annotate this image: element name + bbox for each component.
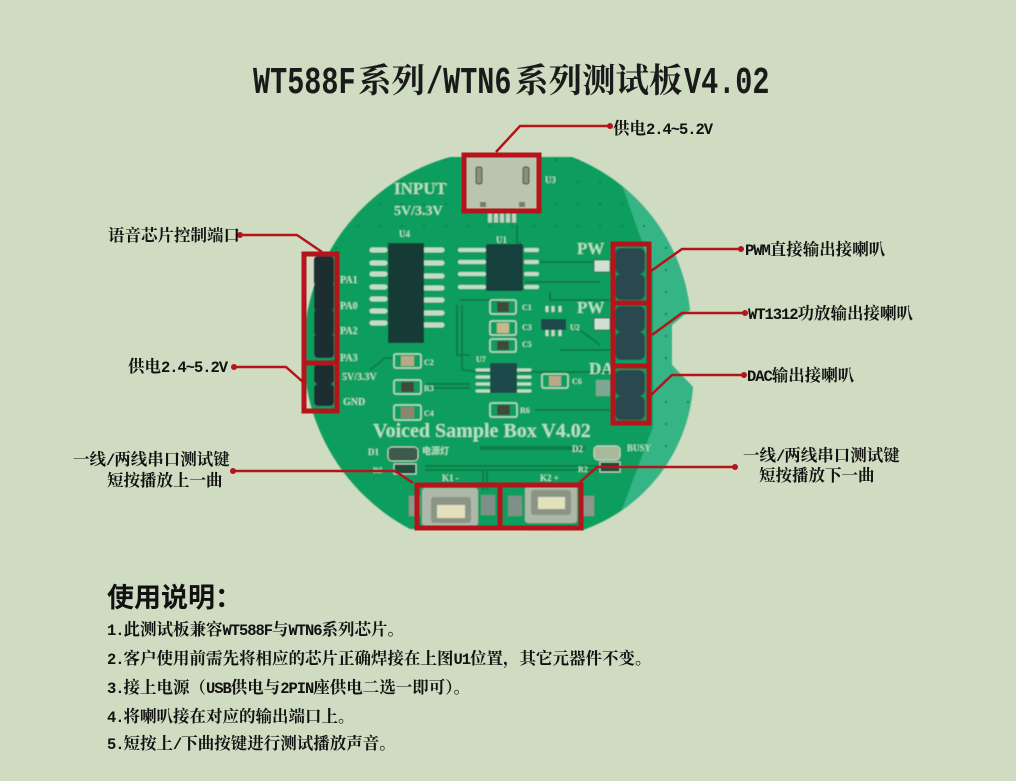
title: V4.02 — [684, 62, 770, 105]
callout: power USB: 供电2.4~5.2V — [613, 119, 714, 139]
instructions heading: 使用说明： — [107, 576, 242, 615]
silkscreen labels: U2 — [570, 323, 580, 332]
instructions list: 3.接上电源（USB供电与2PIN座供电二选一即可）。 — [107, 677, 470, 698]
pin header: left — [314, 256, 334, 406]
red highlight boxes — [304, 155, 649, 528]
instructions list: 4.将喇叭接在对应的输出端口上。 — [107, 706, 355, 727]
silkscreen labels: PW — [577, 239, 604, 258]
silkscreen labels: PA0 — [340, 301, 358, 312]
silkscreen labels: R6 — [520, 406, 530, 415]
pin header: right — [615, 248, 645, 420]
silkscreen labels: C2 — [424, 358, 434, 367]
instructions list: 2.客户使用前需先将相应的芯片正确焊接在上图U1位置，其它元器件不变。 — [107, 648, 652, 669]
chip U4 — [372, 243, 442, 343]
callout: next track key: 一线/两线串口测试键 — [743, 445, 900, 466]
silkscreen labels: GND — [343, 397, 365, 408]
callout: next track key: 短按播放下一曲 — [759, 465, 874, 486]
silkscreen labels: R2 — [578, 465, 588, 474]
panel: circuit board — [304, 156, 720, 530]
silkscreen labels: C1 — [522, 303, 532, 312]
callout: next track key — [743, 445, 900, 486]
silkscreen labels: U1 — [496, 235, 507, 245]
callout: previous track key: 一线/两线串口测试键 — [73, 449, 230, 470]
button K1 — [409, 488, 495, 526]
leader lines — [230, 123, 748, 484]
silkscreen labels: D2 — [572, 444, 583, 454]
silkscreen labels: BUSY — [627, 443, 652, 453]
chip U7 — [477, 363, 530, 393]
silkscreen labels: R3 — [424, 384, 434, 393]
title: /WTN6 — [426, 62, 512, 105]
silkscreen labels: Voiced Sample Box V4.02 — [373, 420, 591, 442]
callout: DAC output: DAC输出接喇叭 — [747, 365, 855, 386]
title — [253, 53, 770, 105]
small components — [388, 260, 620, 474]
board outline — [304, 157, 693, 530]
silkscreen labels: C4 — [424, 409, 434, 418]
instructions list — [107, 619, 652, 754]
callout: PWM output: PWM直接输出接喇叭 — [745, 239, 886, 260]
title: 系列测试板 — [515, 53, 682, 102]
silkscreen labels: PA2 — [340, 326, 358, 337]
callout: previous track key: 短按播放上一曲 — [107, 470, 222, 491]
silkscreen labels — [340, 175, 652, 483]
silkscreen labels: C3 — [522, 323, 532, 332]
instructions list: 1.此测试板兼容WT588F与WTN6系列芯片。 — [107, 619, 404, 640]
callout: WT1312 output: WT1312功放输出接喇叭 — [748, 303, 914, 324]
board edge highlight — [621, 186, 694, 511]
silkscreen labels: R5 — [373, 466, 383, 475]
button K2 — [508, 486, 594, 523]
board via dots — [334, 158, 690, 448]
chip U2 — [541, 306, 566, 336]
silkscreen labels: PA1 — [340, 275, 358, 286]
title: 系列 — [358, 53, 425, 102]
callout: previous track key — [73, 449, 230, 491]
silkscreen labels: K1 - — [442, 473, 459, 483]
silkscreen labels: 电源灯 — [422, 444, 449, 457]
silkscreen labels: U4 — [399, 229, 410, 239]
silkscreen labels: PW — [577, 298, 604, 317]
silkscreen labels: DA — [589, 359, 614, 378]
silkscreen labels: U3 — [545, 175, 556, 185]
silkscreen labels: 5V/3.3V — [394, 204, 443, 219]
micro USB connector — [466, 156, 538, 220]
callout: power header: 供电2.4~5.2V — [128, 357, 229, 377]
silkscreen labels: PA3 — [340, 353, 358, 364]
traces — [370, 225, 625, 490]
silkscreen labels: C6 — [572, 377, 582, 386]
instructions list: 5.短按上/下曲按键进行测试播放声音。 — [107, 733, 396, 754]
silkscreen labels: K2 + — [540, 473, 559, 483]
title: WT588F — [253, 62, 356, 105]
silkscreen labels: INPUT — [394, 179, 448, 198]
silkscreen labels: 5V/3.3V — [342, 372, 378, 383]
callout: voice chip control port: 语音芯片控制端口 — [108, 225, 240, 246]
silkscreen labels: U7 — [476, 355, 486, 364]
silkscreen labels: D1 — [368, 447, 379, 457]
silkscreen labels: C5 — [522, 340, 532, 349]
chip U1 — [460, 244, 537, 291]
